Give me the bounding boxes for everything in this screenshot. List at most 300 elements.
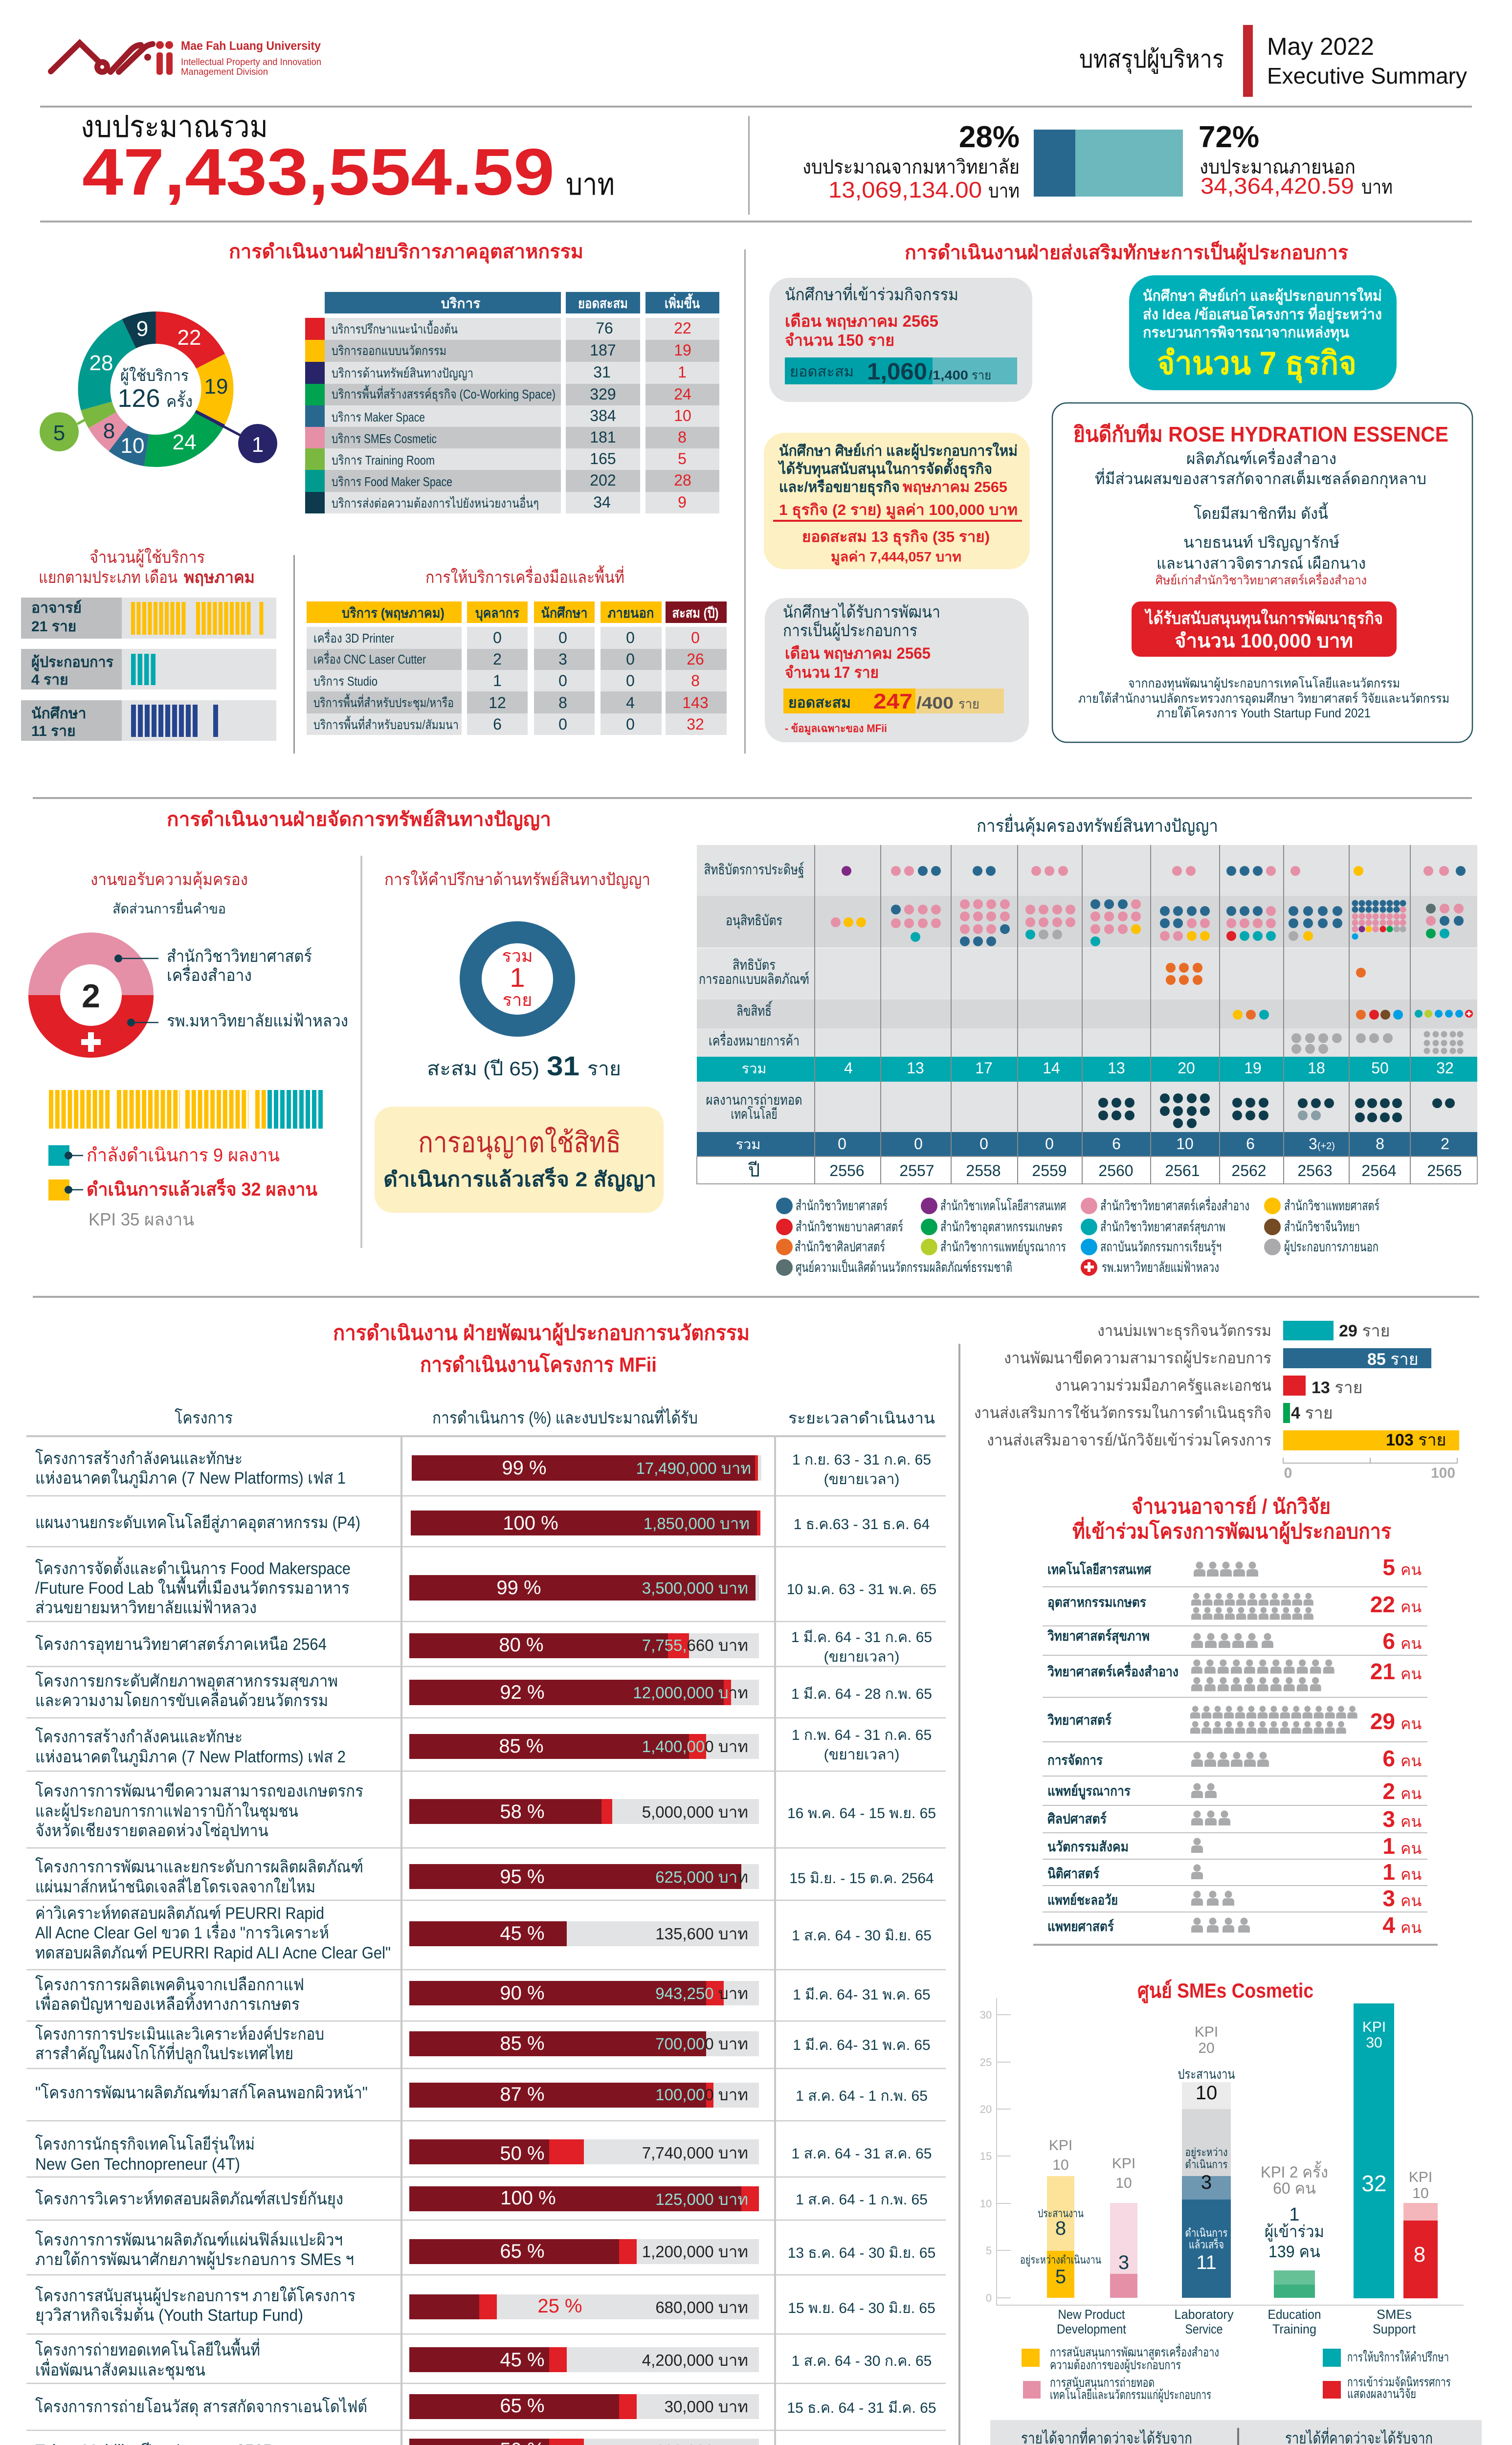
pictogram: researchers by school: อุตสาหกรรมเกษตร	[1047, 1595, 1146, 1611]
project 10	[35, 1975, 931, 2014]
budget split: 72%	[1199, 120, 1259, 154]
table: services: 19	[674, 341, 691, 359]
table: tools and space: 0	[558, 629, 567, 646]
table: tools and space: บริการ Studio	[313, 674, 378, 689]
pictogram: researchers by school: คน	[1401, 1752, 1422, 1770]
table: tools and space: 0	[626, 672, 635, 689]
panel: student participants	[769, 278, 1032, 402]
bars: education training: 139 คน	[1268, 2243, 1320, 2261]
budget split: บาท	[988, 180, 1020, 202]
table: services: บริการ SMEs Cosmetic	[332, 431, 437, 446]
pictogram: researchers by school: วิทยาศาสตร์สุขภาพ	[1047, 1628, 1150, 1645]
table: tools and space: 0	[691, 629, 700, 646]
table: tools and space: 1	[493, 672, 502, 689]
panel: student development: เดือน พฤษภาคม 2565	[785, 645, 931, 662]
legend: SMEs Cosmetic: การให้บริการให้คำปรึกษา	[1347, 2350, 1449, 2364]
bar chart: program participants: 4 ราย	[1291, 1404, 1333, 1423]
users by type: อาจารย์	[31, 600, 82, 616]
report title	[1079, 25, 1467, 97]
pictogram: researchers by school: วิทยาศาสตร์เครื่องสำอาง	[1047, 1662, 1178, 1679]
table: services: บริการ Food Maker Space	[332, 474, 452, 489]
logo: Mae Fah Luang University	[181, 39, 321, 53]
project 13: 7,740,000 บาท	[642, 2144, 748, 2162]
dots: invention patents	[842, 866, 1466, 876]
table: services: 5	[678, 450, 687, 467]
legend: schools: สำนักวิชาการแพทย์บูรณาการ	[940, 1239, 1066, 1255]
project 18: โครงการการถ่ายโอนวัสดุ สารสกัดจากราเอนโดไฟต์	[35, 2397, 367, 2417]
chart: SMEs Cosmetic: Support	[1373, 2322, 1416, 2336]
project 14: 100 %	[500, 2187, 556, 2209]
chart: SMEs Cosmetic: Laboratory	[1175, 2307, 1234, 2322]
chart: IP filings table: ลิขสิทธิ์	[736, 1000, 773, 1019]
project 3: 10 ม.ค. 63 - 31 พ.ค. 65	[787, 1581, 936, 1598]
chart: works status stripes: ดำเนินการแล้วเสร็จ 32 ผลงาน	[87, 1178, 317, 1200]
chart: IP filings table: สิทธิบัตรการประดิษฐ์	[704, 862, 804, 878]
project 8: แผ่นมาส์กหน้าชนิดเจลลี่ไฮโดรเจลจากใยไหม	[35, 1875, 315, 1896]
project 17: โครงการถ่ายทอดเทคโนโลยีในพื้นที่	[35, 2338, 260, 2359]
project 7: 58 %	[500, 1801, 545, 1823]
pictogram: researchers by school: 22	[1370, 1592, 1395, 1617]
heading: innovation entrepreneur development: การดำเนินงานโครงการ MFii	[420, 1353, 657, 1376]
panel: Rose Hydration Essence: ภายใต้โครงการ Youth Startup Fund 2021	[1156, 706, 1371, 720]
table: services: 28	[674, 471, 691, 489]
users by type: ผู้ประกอบการ	[31, 654, 113, 671]
table: services: 187	[590, 341, 616, 359]
table: tools and space: 143	[682, 694, 709, 711]
pictogram: researchers by school: คน	[1401, 1665, 1422, 1683]
row: years: 2556	[829, 1162, 865, 1179]
chart: SMEs Cosmetic: SMEs	[1377, 2307, 1412, 2322]
project 19	[35, 2439, 932, 2445]
bars: laboratory service: 20	[1198, 2040, 1215, 2056]
heading: faculty researchers: จำนวนอาจารย์ / นักวิจัย	[1132, 1495, 1331, 1518]
table: tools and space: 8	[558, 694, 567, 711]
bars: SMEs support: KPI	[1409, 2169, 1432, 2185]
legend: schools: สำนักวิชาแพทยศาสตร์	[1284, 1198, 1379, 1213]
report title: บทสรุปผู้บริหาร	[1079, 45, 1224, 74]
project 6: โครงการสร้างกำลังคนและทักษะ	[35, 1727, 243, 1746]
legend: schools: สำนักวิชาพยาบาลศาสตร์	[796, 1219, 903, 1234]
table: services: 202	[590, 471, 616, 489]
chart: works status stripes	[48, 1109, 325, 1229]
panel: Rose Hydration Essence: ที่มีส่วนผสมของสารสกัดจากสเต็มเซลล์ดอกกุหลาบ	[1095, 468, 1426, 489]
legend: schools: สำนักวิชาวิทยาศาสตร์สุขภาพ	[1100, 1219, 1225, 1235]
project 3	[35, 1556, 936, 1617]
users by type: 21 ราย	[31, 619, 76, 635]
total budget: 47,433,554.59	[82, 135, 555, 209]
donut: service users: 24	[173, 430, 196, 454]
panel: student participants: ยอดสะสม	[790, 364, 854, 380]
project 17: 1 ส.ค. 64 - 30 ก.ค. 65	[792, 2353, 932, 2369]
chart: IP filings table: อนุสิทธิบัตร	[726, 913, 782, 929]
panel: protection requests: เครื่องสำอาง	[167, 964, 252, 985]
table: services: 34	[593, 493, 611, 511]
legend: schools	[776, 1196, 1379, 1276]
panel: student development	[765, 598, 1029, 742]
donut: service users: 5	[53, 421, 65, 445]
pictogram: researchers by school: 1	[1382, 1859, 1395, 1885]
project 15	[35, 2230, 935, 2269]
bar chart: program participants: 13 ราย	[1312, 1378, 1363, 1397]
bars: new product development	[1020, 2137, 1137, 2298]
table: services	[305, 292, 719, 513]
bars: laboratory service: KPI	[1195, 2024, 1218, 2040]
legend: SMEs Cosmetic: การสนับสนุนการถ่ายทอด	[1050, 2375, 1155, 2390]
table header: projects	[26, 1406, 946, 1437]
project 4: 1 มี.ค. 64 - 31 ก.ค. 65	[791, 1629, 932, 1645]
project 6	[35, 1727, 932, 1767]
table: services: ยอดสะสม	[578, 296, 628, 311]
project 1: 17,490,000 บาท	[636, 1459, 751, 1477]
donut: service users: 9	[136, 317, 148, 341]
panel: student participants: ราย	[972, 368, 991, 382]
dots: technology transfer	[1098, 1093, 1455, 1128]
panel: protection requests: สัดส่วนการยื่นคำขอ	[112, 899, 226, 916]
pictogram: researchers by school: คน	[1401, 1892, 1422, 1910]
table: tools and space: บุคลากร	[475, 605, 519, 622]
panel: Rose Hydration Essence: ผลิตภัณฑ์เครื่องสำอาง	[1186, 448, 1336, 467]
project 7: โครงการการพัฒนาขีดความสามารถของเกษตรกร	[35, 1781, 363, 1800]
heading: innovation entrepreneur development: การดำเนินงาน ฝ่ายพัฒนาผู้ประกอบการนวัตกรรม	[333, 1321, 750, 1346]
panel: IP consultation: ราย	[503, 990, 532, 1010]
project 7: 16 พ.ค. 64 - 15 พ.ย. 65	[787, 1805, 936, 1822]
panel: funded businesses: ได้รับทุนสนับสนุนในการจัดตั้งธุรกิจ	[778, 458, 992, 478]
panel: Rose Hydration Essence: ภายใต้สำนักงานปลัดกระทรวงการอุดมศึกษา วิทยาศาสตร์ วิจัยและนวัตกรรม	[1078, 691, 1449, 706]
row totals: transfers: 0	[838, 1135, 846, 1153]
project 14: 125,000 บาท	[655, 2190, 748, 2208]
row totals: filings: 4	[844, 1059, 853, 1077]
project 3: โครงการจัดตั้งและดำเนินการ Food Makerspace	[35, 1556, 351, 1578]
chart: works status stripes: กำลังดำเนินการ 9 ผลงาน	[87, 1145, 280, 1166]
table: services: 9	[678, 493, 687, 511]
chart: SMEs Cosmetic: Education	[1267, 2307, 1321, 2322]
project 2: 1 ธ.ค.63 - 31 ธ.ค. 64	[794, 1516, 930, 1533]
project 3: /Future Food Lab ในพื้นที่เมืองนวัตกรรมอาหาร	[35, 1576, 350, 1598]
project 10: 1 มี.ค. 64- 31 พ.ค. 65	[793, 1987, 931, 2003]
panel: IP consultation: สะสม (ปี 65)	[427, 1058, 539, 1080]
project 6: 1,400,000 บาท	[642, 1737, 748, 1756]
row totals: transfers: 0	[1045, 1135, 1054, 1153]
project 5: 92 %	[500, 1682, 545, 1703]
panel: IP consultation: รวม	[502, 946, 533, 966]
project 5: โครงการยกระดับศักยภาพอุตสาหกรรมสุขภาพ	[35, 1671, 338, 1691]
chart: IP filings table: ปี	[748, 1160, 760, 1181]
panel: Rose Hydration Essence: ได้รับสนับสนุนทุนในการพัฒนาธุรกิจ	[1144, 608, 1383, 629]
heading: entrepreneurship: การดำเนินงานฝ่ายส่งเสริมทักษะการเป็นผู้ประกอบการ	[905, 240, 1349, 265]
project 17	[35, 2338, 932, 2380]
row totals: filings: 19	[1244, 1059, 1262, 1077]
panel: protection requests: 2	[82, 978, 100, 1015]
project 4	[35, 1629, 932, 1665]
bars: new product development: 8	[1055, 2218, 1066, 2239]
project 13	[35, 2134, 932, 2174]
row totals: transfers: 0	[914, 1135, 923, 1153]
row: years: 2562	[1231, 1162, 1267, 1179]
pictogram: researchers by school: แพทยศาสตร์	[1047, 1919, 1114, 1934]
pictogram: researchers by school: นวัตกรรมสังคม	[1047, 1839, 1129, 1854]
project 12: 100,000 บาท	[655, 2086, 748, 2104]
panel: IP consultation: 31	[547, 1050, 579, 1081]
bars: SMEs support: KPI	[1362, 2019, 1386, 2035]
bars: new product development: KPI	[1049, 2137, 1072, 2154]
panel: protection requests: สำนักวิชาวิทยาศาสตร์	[167, 947, 312, 966]
pictogram: researchers by school: 21	[1370, 1659, 1395, 1684]
table: tools and space	[307, 565, 727, 735]
row totals: filings: 50	[1371, 1059, 1389, 1077]
project 4: 7,755,660 บาท	[642, 1636, 748, 1654]
panel: protection requests: งานขอรับความคุ้มครอง	[90, 870, 248, 889]
table header: projects: ระยะเวลาดำเนินงาน	[788, 1409, 935, 1427]
chart: IP filings table	[697, 814, 1477, 1184]
project 12: "โครงการพัฒนาผลิตภัณฑ์มาสก์โคลนพอกผิวหน้า"	[35, 2083, 368, 2102]
panel: IP consultation: การให้คำปรึกษาด้านทรัพย์สินทางปัญญา	[384, 870, 650, 889]
project 10: โครงการการผลิตเพคตินจากเปลือกกาแฟ	[35, 1975, 304, 1994]
panel: IP consultation: ราย	[587, 1058, 621, 1080]
project 8: โครงการการพัฒนาและยกระดับการผลิตผลิตภัณฑ์	[35, 1857, 363, 1876]
row totals: filings: 32	[1436, 1059, 1454, 1077]
panel: Rose Hydration Essence: โดยมีสมาชิกทีม ดังนี้	[1194, 502, 1329, 522]
row totals: filings: 18	[1308, 1059, 1325, 1077]
bar chart: program participants: 29 ราย	[1339, 1322, 1390, 1340]
bars: new product development: 10	[1052, 2157, 1069, 2173]
table: tools and space: ภายนอก	[607, 605, 654, 621]
chart: SMEs Cosmetic: 25	[980, 2056, 992, 2068]
panel: licensing: การอนุญาตใช้สิทธิ	[418, 1126, 621, 1160]
row totals: transfers: 6	[1246, 1135, 1255, 1153]
bars: new product development: KPI	[1112, 2156, 1135, 2172]
project 8: 95 %	[500, 1866, 545, 1888]
panel: funded businesses: และ/หรือขยายธุรกิจ	[779, 479, 900, 496]
row totals: transfers: 8	[1376, 1135, 1384, 1153]
chart: SMEs Cosmetic: New Product	[1058, 2307, 1125, 2322]
project 13: New Gen Technopreneur (4T)	[35, 2155, 240, 2174]
table: services: บริการ Training Room	[332, 453, 435, 467]
row totals: filings: 14	[1043, 1059, 1060, 1077]
bars: laboratory service: 11	[1196, 2252, 1217, 2273]
chart: SMEs Cosmetic: 20	[980, 2103, 992, 2115]
project 17: เพื่อพัฒนาสังคมและชุมชน	[35, 2358, 205, 2380]
table: services: 31	[593, 363, 611, 381]
chart: SMEs Cosmetic: Training	[1272, 2322, 1316, 2336]
logo: Intellectual Property and Innovation	[181, 57, 321, 67]
panel: licensing: ดำเนินการแล้วเสร็จ 2 สัญญา	[383, 1167, 656, 1192]
chart: IP filings table: รวม	[742, 1061, 766, 1077]
panel: businesses in funding review: จำนวน 7 ธุรกิจ	[1157, 345, 1356, 383]
project 1: แห่งอนาคตในภูมิภาค (7 New Platforms) เฟส 1	[35, 1468, 346, 1488]
chart: IP filings table: การออกแบบผลิตภัณฑ์	[699, 971, 809, 987]
row: years: 2563	[1297, 1162, 1333, 1179]
project 6: 85 %	[499, 1735, 544, 1757]
users by type: พฤษภาคม	[184, 568, 255, 587]
chart: SMEs Cosmetic: 5	[986, 2245, 992, 2257]
table: tools and space: 3	[558, 650, 567, 668]
table: services: 8	[678, 428, 687, 446]
project 12: 87 %	[500, 2084, 545, 2105]
pictogram: researchers by school: ศิลปศาสตร์	[1047, 1811, 1107, 1826]
project 9: All Acne Clear Gel ขวด 1 เรื่อง "การวิเคราะห์	[35, 1921, 329, 1942]
donut: service users: ผู้ใช้บริการ	[120, 367, 189, 385]
project 15: 13 ธ.ค. 64 - 30 มิ.ย. 65	[788, 2245, 935, 2261]
bars: laboratory service: แล้วเสร็จ	[1189, 2237, 1224, 2251]
donut: service users	[40, 317, 277, 463]
table: services: บริการส่งต่อความต้องการไปยังหน่วยงานอื่นๆ	[332, 494, 539, 511]
bar chart: program participants: 100	[1431, 1465, 1455, 1481]
budget split: 13,069,134.00	[828, 177, 982, 202]
chart: IP filings table: สิทธิบัตร	[733, 957, 776, 973]
chart: SMEs Cosmetic: 15	[980, 2150, 992, 2162]
bar chart: program participants: 103 ราย	[1386, 1431, 1446, 1449]
panel: funded businesses: พฤษภาคม 2565	[903, 479, 1007, 495]
users by type: จำนวนผู้ใช้บริการ	[89, 548, 205, 567]
panel: funded businesses	[764, 433, 1030, 569]
project 13: 1 ส.ค. 64 - 31 ส.ค. 65	[792, 2146, 932, 2162]
pictogram: researchers by school: 6	[1382, 1628, 1395, 1654]
table: tools and space: เครื่อง CNC Laser Cutter	[313, 650, 426, 667]
budget split: 28%	[959, 120, 1020, 154]
table: services: 1	[678, 363, 687, 381]
row totals: transfers: 0	[979, 1135, 988, 1153]
pictogram: researchers by school: แพทย์ชะลอวัย	[1047, 1892, 1118, 1908]
panel: funded businesses: นักศึกษา ศิษย์เก่า และผู้ประกอบการใหม่	[779, 442, 1018, 460]
bars: SMEs support: 32	[1361, 2171, 1387, 2196]
users by type: 11 ราย	[31, 723, 76, 739]
project 11: สารสำคัญในผงโกโก้ที่ปลูกในประเทศไทย	[35, 2042, 293, 2064]
table: tools and space: 12	[489, 694, 506, 711]
chart: SMEs Cosmetic	[980, 1998, 1464, 2336]
row totals: transfers: 3(+2)	[1309, 1135, 1335, 1153]
project 6: 1 ก.พ. 64 - 31 ก.ค. 65	[792, 1727, 932, 1743]
project 5: และความงามโดยการขับเคลื่อนด้วยนวัตกรรม	[35, 1689, 328, 1710]
pictogram: researchers by school: 3	[1382, 1886, 1395, 1911]
budget split: 34,364,420.59	[1201, 173, 1354, 199]
table: services: เพิ่มขึ้น	[665, 293, 700, 311]
budget split	[802, 120, 1393, 202]
legend: SMEs Cosmetic	[1022, 2343, 1451, 2402]
legend: schools: สำนักวิชาวิทยาศาสตร์เครื่องสำอาง	[1100, 1196, 1249, 1213]
project 12	[35, 2083, 928, 2108]
pictogram: researchers by school: คน	[1401, 1715, 1422, 1733]
bar chart: program participants	[974, 1321, 1459, 1481]
dots: design patents, copyright and trademarks	[1166, 963, 1473, 1054]
pictogram: researchers by school: นิติศาสตร์	[1047, 1866, 1099, 1881]
project 16: 15 พ.ย. 64 - 30 มิ.ย. 65	[788, 2300, 935, 2316]
project 10: เพื่อลดปัญหาของเหลือทิ้งทางการเกษตร	[35, 1992, 300, 2014]
chart: IP filings table: รวม	[736, 1137, 760, 1153]
legend: schools: สำนักวิชาศิลปศาสตร์	[795, 1239, 885, 1254]
table: services: บริการ	[441, 296, 480, 311]
table: tools and space: 0	[558, 715, 567, 733]
table: tools and space: 2	[493, 650, 502, 668]
row: years	[829, 1162, 1462, 1179]
bars: laboratory service: ประสานงาน	[1178, 2067, 1235, 2082]
panel: student participants: จำนวน 150 ราย	[785, 331, 894, 349]
donut: service users: 8	[103, 419, 115, 443]
legend: schools: สำนักวิชาวิทยาศาสตร์	[796, 1198, 888, 1213]
row totals: transfers	[838, 1135, 1449, 1153]
panel: businesses in funding review: ส่ง Idea /ข้อเสนอโครงการ ที่อยู่ระหว่าง	[1143, 304, 1382, 324]
table: services: บริการพื้นที่สร้างสรรค์ธุรกิจ (Co-Working Space)	[332, 385, 556, 402]
table: tools and space: การให้บริการเครื่องมือและพื้นที่	[425, 565, 624, 587]
row totals: filings	[844, 1059, 1454, 1077]
panel: funded businesses: 1 ธุรกิจ (2 ราย) มูลค่า 100,000 บาท	[779, 501, 1018, 519]
bar chart: program participants: งานส่งเสริมอาจารย์/นักวิจัยเข้าร่วมโครงการ	[987, 1431, 1271, 1449]
bars: laboratory service: 3	[1201, 2172, 1212, 2193]
project 14: 1 ส.ค. 64 - 1 ก.พ. 65	[796, 2192, 928, 2208]
panel: student participants: เดือน พฤษภาคม 2565	[785, 312, 938, 330]
pictogram: researchers by school: คน	[1401, 1813, 1422, 1830]
row: years: 2559	[1032, 1162, 1067, 1179]
bars: new product development: 10	[1115, 2175, 1132, 2191]
report title: May 2022	[1267, 33, 1374, 60]
pictogram: researchers by school: แพทย์บูรณาการ	[1047, 1783, 1131, 1800]
project 11: 1 มี.ค. 64- 31 พ.ค. 65	[793, 2037, 931, 2053]
project 7	[35, 1781, 936, 1841]
row totals: transfers: 2	[1441, 1135, 1449, 1153]
table: tools and space: 32	[687, 715, 704, 733]
legend: SMEs Cosmetic: ความต้องการของผู้ประกอบการ	[1050, 2357, 1181, 2373]
heading: faculty researchers: ที่เข้าร่วมโครงการพัฒนาผู้ประกอบการ	[1072, 1517, 1391, 1544]
panel: businesses in funding review: นักศึกษา ศิษย์เก่า และผู้ประกอบการใหม่	[1143, 287, 1382, 305]
project 16: ยุววิสาหกิจเริ่มต้น (Youth Startup Fund)	[35, 2304, 303, 2325]
heading: faculty researchers	[1072, 1495, 1391, 1544]
project 9	[35, 1904, 932, 1962]
header	[51, 25, 1467, 97]
donut: service users: ครั้ง	[166, 390, 193, 410]
project 15: 1,200,000 บาท	[642, 2243, 748, 2261]
table: tools and space: เครื่อง 3D Printer	[313, 629, 394, 645]
total budget: บาท	[566, 168, 615, 201]
panel: IP consultation	[384, 870, 650, 1081]
bars: new product development: ประสานงาน	[1038, 2207, 1084, 2220]
project 15: โครงการการพัฒนาผลิตภัณฑ์แผ่นฟิล์มแปะผิวฯ	[35, 2230, 343, 2249]
project 13: โครงการนักธุรกิจเทคโนโลยีรุ่นใหม่	[35, 2134, 255, 2154]
project 13: 50 %	[500, 2143, 545, 2164]
legend: schools: สถาบันนวัตกรรมการเรียนรู้ฯ	[1100, 1239, 1222, 1255]
pictogram: researchers by school: 29	[1370, 1709, 1395, 1734]
users by type: นักศึกษา	[31, 706, 86, 722]
bars: laboratory service: ดำเนินการ	[1185, 2226, 1227, 2239]
panel: licensing	[375, 1107, 664, 1213]
project 5: 12,000,000 บาท	[633, 1684, 748, 1702]
users by type: แยกตามประเภท เดือน	[39, 568, 178, 587]
project 11: โครงการการประเมินและวิเคราะห์องค์ประกอบ	[35, 2024, 324, 2044]
legend: SMEs Cosmetic: เทคโนโลยีและนวัตกรรมแก่ผู้ประกอบการ	[1050, 2387, 1211, 2402]
chart: SMEs Cosmetic: 10	[980, 2198, 992, 2210]
project 7: และผู้ประกอบการกาแฟอาราบิก้าในชุมชน	[35, 1801, 298, 1821]
project 8: 15 มิ.ย. - 15 ต.ค. 2564	[789, 1870, 934, 1887]
table: tools and space: 0	[493, 629, 502, 646]
legend: SMEs Cosmetic: การสนับสนุนการพัฒนาสูตรเครื่องสำอาง	[1050, 2343, 1219, 2360]
donut: service users: 19	[204, 375, 228, 399]
project 8	[35, 1857, 934, 1896]
legend: SMEs Cosmetic: การเข้าร่วมจัดนิทรรศการ	[1347, 2375, 1451, 2389]
project 8: 625,000 บาท	[655, 1868, 748, 1886]
project 16: โครงการสนับสนุนผู้ประกอบการฯ ภายใต้โครงการ	[35, 2286, 356, 2306]
table: tools and space: 26	[687, 650, 704, 668]
project 18: 30,000 บาท	[665, 2398, 748, 2416]
table header: projects: โครงการ	[175, 1408, 233, 1427]
project 1	[35, 1449, 931, 1488]
project 1: 99 %	[502, 1457, 547, 1479]
panel: student participants: /1,400	[929, 368, 968, 382]
project 7: 5,000,000 บาท	[642, 1803, 748, 1821]
panel: Rose Hydration Essence: จำนวน 100,000 บาท	[1175, 630, 1353, 652]
table: tools and space: 0	[626, 715, 635, 733]
project 2	[35, 1511, 930, 1535]
table: services: บริการ Maker Space	[332, 410, 425, 424]
pictogram: researchers by school: 3	[1382, 1806, 1395, 1832]
project 18: 65 %	[500, 2395, 545, 2417]
